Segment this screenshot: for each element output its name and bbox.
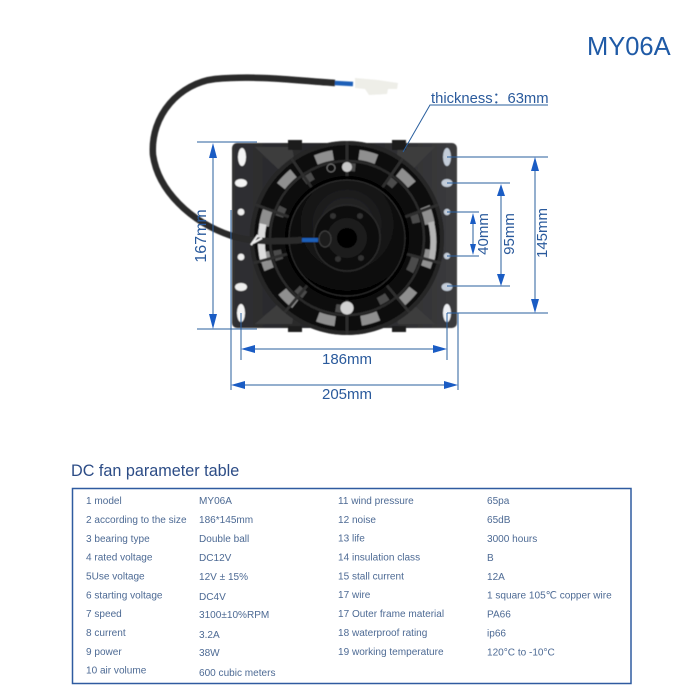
table column: values 1-10: 12V ± 15% [199, 572, 248, 583]
table column: values 11-19: B [487, 553, 494, 564]
table column: parameters 11-19: 15 stall current [338, 572, 404, 582]
dimension: 205mm overall width: 205mm [322, 386, 372, 403]
table column: parameters 1-10: 1 model [86, 496, 122, 507]
dimension: 167mm height: 167mm [193, 209, 210, 263]
dimension: 186mm width [241, 313, 447, 368]
dimension: 186mm width: 186mm [322, 351, 372, 368]
dimension: 145mm hole spacing [447, 157, 551, 313]
table column: parameters 1-10: 10 air volume [86, 666, 147, 676]
table column: values 1-10: 3100±10%RPM [199, 610, 269, 621]
dimension: 167mm height [193, 142, 257, 329]
table column: parameters 1-10: 3 bearing type [86, 534, 150, 545]
table column: parameters 11-19: 11 wind pressure [338, 496, 414, 507]
motor housing [285, 176, 409, 300]
dimension: 40mm hole spacing: 40mm [475, 213, 492, 255]
table column: values 11-19: 12A [487, 572, 505, 583]
table column: parameters 11-19: 19 working temperature [338, 647, 444, 658]
dimension: thickness callout [403, 91, 549, 152]
table column: values 1-10: 3.2A [199, 630, 220, 641]
table column: values 11-19: 120°C to -10°C [487, 648, 555, 658]
table column: values 1-10 [199, 496, 276, 679]
table column: parameters 1-10: 4 rated voltage [86, 552, 153, 564]
table column: values 1-10: MY06A [199, 496, 232, 507]
table column: parameters 1-10: 7 speed [86, 609, 122, 620]
table column: parameters 11-19: 18 waterproof rating [338, 628, 427, 639]
table column: parameters 1-10: 9 power [86, 647, 122, 658]
dimension: 40mm hole spacing [447, 212, 492, 256]
table column: parameters 1-10: 8 current [86, 628, 126, 639]
dimension: 95mm hole spacing: 95mm [501, 213, 518, 255]
table column: values 1-10: 600 cubic meters [199, 668, 276, 679]
table column: values 11-19: ip66 [487, 628, 506, 640]
table column: parameters 11-19: 12 noise [338, 515, 376, 526]
table column: parameters 1-10: 2 according to the size [86, 515, 187, 526]
table column: values 1-10: Double ball [199, 534, 249, 545]
table column: values 1-10: DC12V [199, 553, 232, 564]
table column: values 1-10: DC4V [199, 592, 226, 603]
table column: values 11-19: 1 square 105℃ copper wire [487, 590, 612, 602]
table column: parameters 1-10: 6 starting voltage [86, 590, 163, 602]
table column: values 11-19: 65pa [487, 496, 510, 507]
table column: values 11-19: 3000 hours [487, 534, 537, 545]
dimension: thickness callout: thickness：63mm [431, 91, 549, 107]
parameter table [72, 488, 631, 684]
table column: values 11-19: 65dB [487, 515, 511, 526]
table column: values 11-19 [487, 496, 612, 658]
mounting plate [232, 140, 457, 332]
table column: values 1-10: 186*145mm [199, 515, 253, 526]
cable with connector [153, 78, 398, 247]
table column: parameters 1-10 [86, 496, 187, 676]
table column: values 11-19: PA66 [487, 610, 511, 620]
table column: values 1-10: 38W [199, 648, 220, 659]
table column: parameters 11-19: 17 wire [338, 590, 371, 601]
table column: parameters 11-19: 17 Outer frame material [338, 609, 444, 620]
dimension: 205mm overall width [231, 210, 458, 403]
dimension: 95mm hole spacing [447, 183, 518, 286]
product photo: radiator fan with mounting plate [153, 78, 457, 335]
dimension: 145mm hole spacing: 145mm [534, 208, 551, 258]
table column: parameters 11-19: 14 insulation class [338, 552, 420, 564]
title: model name: MY06A [587, 33, 671, 61]
table column: parameters 11-19: 13 life [338, 534, 365, 544]
heading: parameter table: DC fan parameter table [71, 462, 239, 480]
table column: parameters 11-19 [338, 496, 444, 658]
fan blades and guard [250, 141, 444, 335]
table column: parameters 1-10: 5Use voltage [86, 572, 145, 582]
